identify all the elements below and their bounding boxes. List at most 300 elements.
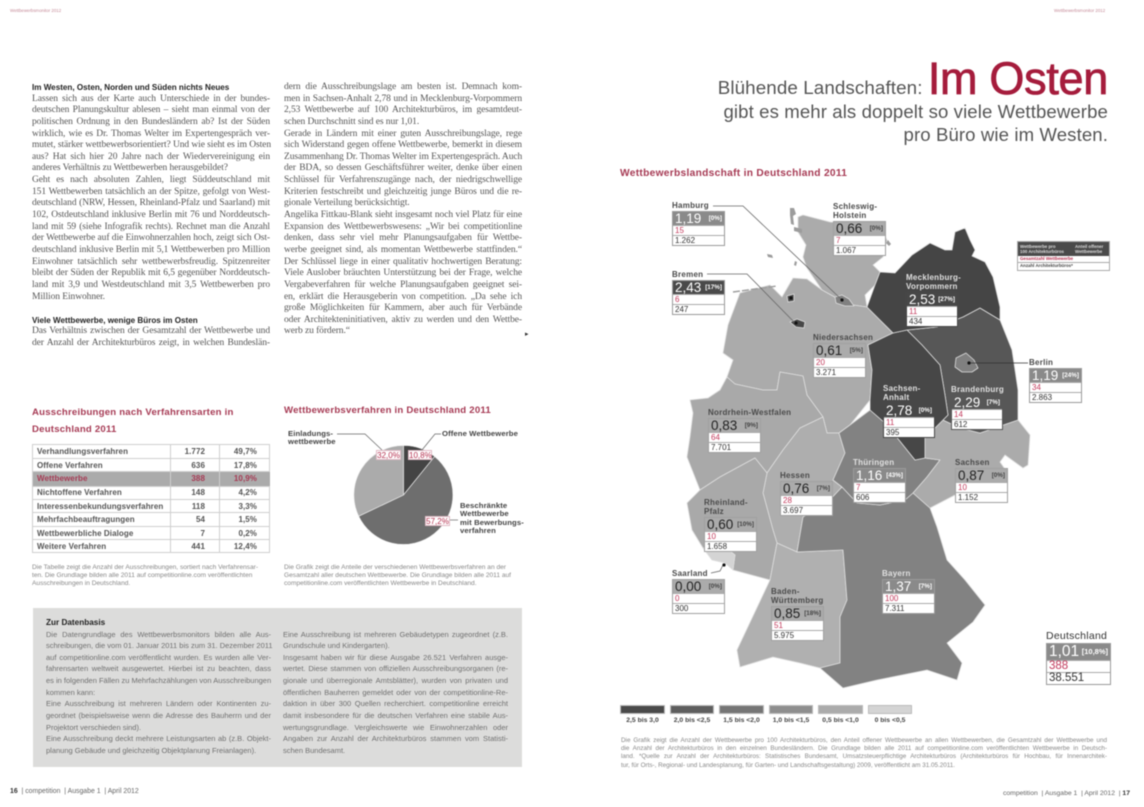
text: Berlin	[1029, 358, 1053, 367]
text column right: denken, dass sehr viel mehr Planungsaufgaben für Wettbe-	[284, 233, 522, 243]
state: Bremerhaven	[787, 294, 794, 302]
data: Bayern: [7%]	[919, 583, 932, 590]
row 8: Weitere Verfahren	[37, 542, 106, 551]
data: Rheinland-Pfalz	[704, 498, 756, 552]
data: Hamburg	[672, 201, 726, 246]
data: Sachsen-Anhalt: [0%]	[919, 407, 932, 414]
text column left: wirklich, wie es Dr. Thomas Welter im Expertengespräch ver-	[32, 129, 270, 139]
caption: table: Ausschreibungen in Deutschland.	[32, 580, 130, 587]
caption: pie chart: Die Grafik zeigt die Anteile der verschiedenen Wettbewerbsverfahren an der	[284, 564, 506, 571]
end-of-article arrow: ▸	[525, 331, 529, 338]
state: Berlin	[955, 353, 978, 372]
slice: Beschränkte Wettbewerbe	[359, 456, 453, 544]
data: Bayern: 1,37	[885, 579, 911, 594]
data: Baden-Württemberg: 5.975	[774, 631, 794, 640]
state: Rheinland-Pfalz	[687, 458, 777, 580]
text: Deutschland	[1046, 630, 1107, 642]
key row red	[1018, 256, 1109, 263]
row 5: 3,3%	[238, 502, 257, 510]
row 1: 1.772	[185, 447, 205, 456]
state: Sachsen	[913, 420, 1030, 508]
legend label: 1,0 bis <1,5	[773, 717, 809, 724]
data: Schleswig-Holstein: 1.067	[836, 246, 856, 255]
data: Nordrhein-Westfalen	[708, 408, 792, 452]
leader lines	[337, 434, 458, 520]
legend label: 2,0 bis <2,5	[674, 717, 710, 724]
swatch 0,5 bis 1,0	[818, 705, 863, 714]
pie label: Beschränkte Wettbewerbe: Wettbewerbe	[460, 509, 509, 518]
text: Hessen	[780, 471, 810, 480]
panel: Zur Datenbasis	[33, 608, 522, 767]
text column left	[32, 83, 272, 348]
text: Sachsen-	[883, 384, 921, 393]
data: Bremen: [17%]	[705, 284, 722, 291]
text: Bremen	[672, 270, 703, 279]
data: Rheinland-Pfalz: 1.658	[707, 542, 727, 551]
data: Baden-Württemberg	[770, 587, 824, 640]
key row: Anzahl Architekturbüros*	[1020, 263, 1073, 268]
text column left: der Anzahl der Architekturbüros zeigt, in welchen Bundeslän-	[32, 338, 270, 348]
text column right: Angelika Fittkau-Blank sieht insgesamt noch viel Platz für eine	[284, 210, 522, 220]
data: Saarland: [0%]	[709, 583, 722, 590]
text column left: land mit 59 (siehe Infografik rechts). Rechnet man die Anzahl	[32, 222, 270, 232]
state: Sachsen-Anhalt	[868, 330, 948, 460]
running header left: Wettbewerbsmonitor 2012	[10, 8, 61, 13]
swatch 1,0 bis 1,5	[769, 705, 813, 714]
text column right: en, erklärt die Herausgeberin von competition. „Da sehe ich	[284, 292, 522, 302]
data: Bayern	[882, 569, 935, 614]
table: Verfahrensarten	[32, 444, 270, 553]
data: Niedersachsen: [5%]	[850, 347, 863, 354]
row 3 highlighted	[33, 472, 270, 486]
row 6	[33, 513, 270, 526]
row 8: 441	[191, 542, 205, 551]
data: Sachsen: 10	[958, 483, 967, 492]
data: Mecklenburg-Vorpommern: 11	[909, 307, 917, 316]
text column right: 2,53 Wettbewerbe auf 100 Architekturbüros, im gesamtdeut-	[284, 105, 522, 115]
text column right: große Möglichkeiten für Kammern, aber auch für Verbände	[284, 303, 522, 313]
text: Saarland	[672, 569, 708, 578]
text column right: Vergabeverfahren für welche Planungsaufgaben geeignet sei-	[284, 280, 522, 290]
text column left: Million Einwohner.	[32, 292, 105, 302]
state: Niedersachsen	[723, 278, 893, 433]
data: Niedersachsen	[813, 333, 873, 378]
data: Mecklenburg-Vorpommern: [27%]	[938, 296, 955, 303]
state: Mecklenburg-Vorpommern	[867, 228, 1000, 333]
state: Nordrhein-Westfalen	[687, 372, 823, 490]
text column left: deutschland (NRW, Hessen, Rheinland-Pfalz und Saarland) mit	[32, 198, 270, 208]
caption: map: land. *Quelle zur Anzahl der Architekturbüros: Statistisches Bundesamt, Umsatzsteuerpflichtige Architekturbüros (Architekturbüros für Hochbau, für Innenarchitek-	[621, 753, 1107, 760]
text column left: anderes Verhältnis zu Wettbewerben herausgebildet?	[32, 163, 228, 173]
panel text left: Projektort verschieden sind).	[46, 723, 141, 732]
text column left: Geht es nach absoluten Zahlen, liegt Süddeutschland mit	[32, 175, 270, 185]
panel text left: auf competitionline.com veröffentlicht wurden. Es wurden alle Ver-	[46, 653, 271, 662]
data: Schleswig-Holstein: 7	[836, 236, 840, 245]
text column left: Im Westen, Osten, Norden und Süden nichts Neues	[32, 83, 229, 92]
row 8	[36, 542, 258, 551]
panel text right: schen Bundesamt.	[283, 746, 345, 755]
row 1: 49,7%	[234, 447, 257, 456]
text: Pfalz	[704, 507, 724, 516]
panel text right: damit insbesondere für die deutschen Verfahren eine stabile Aus-	[283, 711, 508, 720]
state: Hamburg	[835, 295, 854, 306]
legend label: 1,5 bis <2,0	[723, 717, 760, 724]
panel text right: Angaben zur Anzahl der Architekturbüros stammen vom Statisti-	[283, 734, 508, 743]
state: Schleswig-Holstein	[798, 215, 887, 307]
data: Brandenburg: 14	[954, 410, 963, 419]
text column left: Lassen sich aus der Karte auch Unterschiede in der bundes-	[32, 94, 270, 104]
text column right: Expansion des Wettbewerbswesens: „Wir bei competitionline	[284, 222, 522, 232]
state: Bayern	[797, 487, 985, 688]
text column right: men in Sachsen-Anhalt 2,78 und in Mecklenburg-Vorpommern	[284, 94, 522, 104]
text column right: schen Durchschnitt sind es nur 1,01.	[284, 117, 419, 127]
data: Thüringen	[852, 458, 906, 504]
data: Mecklenburg-Vorpommern	[906, 273, 961, 328]
data: Nordrhein-Westfalen: 7.701	[711, 443, 731, 452]
pie label: Beschränkte Wettbewerbe	[460, 501, 524, 535]
data: Brandenburg	[950, 385, 1004, 431]
heading: table: Deutschland 2011	[32, 424, 117, 435]
row 7: 7	[200, 528, 205, 538]
state: Thüringen	[833, 410, 940, 505]
data: Hamburg: [0%]	[709, 215, 722, 222]
swatch 2,0 bis 2,5	[670, 705, 714, 714]
state: Hessen	[763, 417, 845, 552]
text column right: werb zu fördern.“	[284, 326, 350, 336]
key row red: Gesamtzahl Wettbewerbe	[1020, 256, 1073, 261]
text: Rheinland-	[704, 498, 748, 507]
panel text left: kommen kann:	[46, 688, 95, 697]
text: Sachsen	[955, 458, 990, 467]
pie label: Beschränkte Wettbewerbe: verfahren	[460, 526, 496, 535]
data: Hamburg: 1,19	[675, 211, 701, 226]
data: Baden-Württemberg: [18%]	[804, 610, 821, 617]
text column right: Viele Auslober bräuchten Unterstützung bei der Frage, welche	[284, 268, 522, 278]
row 7: Wettbewerbliche Dialoge	[37, 528, 133, 538]
leader lines	[707, 206, 1028, 573]
data: Brandenburg: [7%]	[987, 399, 1000, 406]
data: Mecklenburg-Vorpommern: 2,53	[909, 292, 935, 307]
data: Deutschland: 1,01	[1049, 643, 1079, 660]
data: Saarland: 0	[675, 594, 679, 603]
text: Anhalt	[883, 393, 909, 402]
swatch 2,5 bis 3,0	[620, 705, 665, 714]
data: Berlin: 1,19	[1032, 368, 1058, 383]
data: Niedersachsen: 0,61	[816, 343, 842, 358]
headline	[718, 53, 1108, 146]
text column right: dern die Ausschreibungslage am besten ist. Demnach kom-	[284, 82, 522, 92]
data: Niedersachsen: 20	[816, 358, 825, 367]
data: Rheinland-Pfalz: [10%]	[737, 521, 754, 528]
data: Sachsen: [0%]	[992, 472, 1005, 479]
data: Saarland	[672, 569, 726, 614]
text: Nordrhein-Westfalen	[708, 408, 791, 417]
row 5: 118	[192, 502, 205, 510]
footer left: 16 | competition | Ausgabe 1 | April 2012	[10, 788, 139, 795]
text column right: Schlüssel für Verfahrenszugänge nach, der niedrigschwellige	[284, 175, 522, 185]
state: Bremen	[790, 319, 805, 328]
text column left: Das Verhältnis zwischen der Gesamtzahl der Wettbewerbe und	[32, 326, 270, 336]
legend label: 0 bis <0,5	[875, 717, 905, 724]
row 2: Offene Verfahren	[37, 460, 103, 470]
text column left: politischen Ordnung in den Bundesländern ab? Ist der Süden	[32, 117, 270, 127]
data: Hessen: 0,76	[783, 481, 809, 496]
panel text left: geordnet (beispielsweise wenn die Adresse des Bauherrn und der	[46, 711, 271, 720]
data: Saarland: 0,00	[675, 579, 701, 594]
data: Sachsen	[954, 458, 1008, 504]
map dots	[722, 296, 971, 567]
text column left: 151 Wettbewerben tatsächlich an der Spitze, gefolgt von West-	[32, 187, 270, 197]
data: Berlin: 34	[1032, 383, 1041, 392]
row 6: Mehrfachbeauftragungen	[37, 515, 135, 524]
data: Brandenburg: 612	[954, 420, 967, 429]
panel text right: daktion in über 300 Quellen recherchiert. competitionline erreicht	[283, 699, 508, 708]
text column right: der BDA, so dessen Geschäftsführer weiter, denke über einen	[284, 163, 522, 173]
data: Sachsen-Anhalt: 395	[886, 428, 899, 437]
legend: colour scale	[620, 704, 912, 724]
panel text left: schreibungen, die vom 01. Januar 2011 bis zum 31. Dezember 2011	[46, 641, 273, 650]
heading: map: Wettbewerbslandschaft in Deutschland 2011	[620, 168, 847, 179]
caption: map	[620, 736, 1108, 769]
row 8: 12,4%	[234, 542, 257, 551]
data: Hessen: 28	[783, 496, 792, 505]
data: Bremen: 6	[675, 295, 679, 304]
key header: Anteil offener	[1075, 244, 1103, 248]
data: Deutschland: [10,8%]	[1082, 647, 1108, 656]
heading: table: Ausschreibungen nach Verfahrensarten in	[32, 407, 234, 418]
data: Nordrhein-Westfalen: 64	[711, 433, 720, 442]
text column right: sich Widerstand gegen offene Wettbewerbe, bemerkt in diesem	[284, 140, 522, 150]
text column left: Viele Wettbewerbe, wenige Büros im Osten	[32, 316, 198, 325]
text column right: gionale Verteilung berücksichtigt.	[284, 198, 410, 208]
data: Berlin: 2.863	[1032, 393, 1052, 402]
text column right: Zusammenhang Dr. Thomas Welter im Expertengespräch. Auch	[284, 152, 522, 162]
text column left: deutschland inklusive Berlin mit 5,1 Wettbewerben pro Million	[32, 245, 270, 255]
panel text left: fahrensarten weltweit ausgewertet. Hierbei ist zu beachten, dass	[46, 664, 271, 673]
text: Thüringen	[853, 458, 894, 467]
pie percent: 10,8%: 10,8%	[409, 451, 432, 460]
text: Schleswig-	[833, 202, 877, 211]
row 3 highlighted: Wettbewerbe	[37, 474, 88, 483]
data: Baden-Württemberg: 0,85	[774, 606, 800, 621]
row 3 highlighted: 388	[191, 474, 205, 483]
data: Berlin: [24%]	[1062, 372, 1079, 379]
pie label: Einladungswettbewerbe	[287, 429, 336, 446]
text column right: Kriterien festschreibt und gleichzeitig junge Büros und die re-	[284, 187, 522, 197]
text: Baden-	[771, 587, 800, 596]
data: Rheinland-Pfalz: 10	[707, 532, 716, 541]
text: Brandenburg	[951, 385, 1004, 394]
East Frisian islands	[733, 286, 777, 292]
pie label: Einladungswettbewerbe: wettbewerbe	[288, 437, 336, 446]
heading: pie chart: Wettbewerbsverfahren in Deutschland 2011	[284, 405, 491, 416]
data: Thüringen: [43%]	[886, 472, 903, 479]
panel text left: es in folgenden Fällen zu Mehrfachzählungen von Ausschreibungen	[46, 676, 271, 685]
row 7	[33, 526, 270, 540]
caption: pie chart: competitionline.com veröffentlichten Wettbewerbe in Deutschland.	[284, 580, 477, 587]
data: Sachsen-Anhalt	[882, 384, 936, 439]
data: Bremen: 2,43	[675, 280, 701, 295]
data: Hessen: [7%]	[817, 485, 830, 492]
text: Württemberg	[771, 596, 824, 605]
data: Bayern: 7.311	[885, 604, 904, 613]
text: Niedersachsen	[813, 333, 873, 342]
data: Thüringen: 7	[856, 483, 860, 492]
data: Mecklenburg-Vorpommern: 434	[909, 317, 922, 326]
headline line 2: gibt es mehr als doppelt so viele Wettbewerbe	[723, 101, 1108, 122]
panel text left	[46, 630, 273, 755]
slice: Offene Wettbewerbe	[404, 446, 435, 495]
headline line 1: Blühende Landschaften: Im Osten	[718, 53, 1108, 104]
data: Deutschland: 38.551	[1049, 672, 1084, 684]
pie label: Beschränkte Wettbewerbe: Beschränkte	[460, 501, 507, 510]
row 4: 148	[191, 488, 205, 497]
footer right: competition | Ausgabe 1 | April 2012 | 17	[1003, 790, 1130, 797]
panel text left: Die Datengrundlage des Wettbewerbsmonitors bilden alle Aus-	[46, 630, 271, 638]
pie percent: 32,0%: 32,0%	[377, 451, 400, 460]
text: Holstein	[833, 211, 867, 220]
row 1	[33, 445, 270, 458]
caption: table: ten. Die Grundlage bilden alle 2011 auf competitionline.com veröffentlichten	[32, 572, 252, 579]
data: Hessen: 3.697	[783, 506, 803, 515]
pie percent: 57,2%: 57,2%	[426, 517, 449, 526]
text column left: land mit 3,9 und Westdeutschland mit 3,5 Wettbewerben pro	[32, 280, 270, 290]
panel heading: Zur Datenbasis	[46, 618, 105, 627]
key header: Wettbewerbe pro	[1020, 244, 1056, 248]
data: Sachsen: 1.152	[958, 493, 978, 502]
data: Nordrhein-Westfalen: [9%]	[745, 422, 758, 429]
data: Sachsen-Anhalt: 2,78	[886, 403, 912, 418]
data: Sachsen-Anhalt: 11	[886, 418, 894, 427]
panel text left: Eine Ausschreibung ist mehreren Ländern oder Kontinenten zu-	[46, 699, 271, 708]
row 2: 17,8%	[234, 460, 257, 470]
text column left: 102, Ostdeutschland inklusive Berlin mit 76 und Norddeutsch-	[32, 210, 270, 220]
data: Hamburg: 1.262	[675, 236, 695, 245]
data: Schleswig-Holstein: [0%]	[870, 225, 883, 232]
caption: map: die Anzahl der Architekturbüros in den einzelnen Bundesländern. Die Grundlage bilden alle 2011 auf competitionline.com veröffentlichten Wettbewerbe in Deutsch-	[621, 745, 1107, 752]
row 4: 4,2%	[238, 488, 257, 497]
caption: pie chart: Gesamtzahl aller deutschen Wettbewerbe. Die Grundlage bilden alle 2011 auf	[284, 572, 511, 579]
legend label: 0,5 bis <1,0	[822, 717, 859, 724]
panel text left: Eine Ausschreibung deckt mehrere Leistungsarten ab (z.B. Objekt-	[46, 734, 271, 743]
caption: table: Die Tabelle zeigt die Anzahl der Ausschreibungen, sortiert nach Verfahrensar-	[32, 564, 258, 571]
data: Schleswig-Holstein	[832, 202, 886, 256]
data: Rheinland-Pfalz: 0,60	[707, 517, 733, 532]
data: Bayern: 100	[885, 594, 898, 603]
state: Brandenburg	[907, 308, 1018, 433]
swatch 0 bis 0,5	[868, 705, 912, 714]
caption: map: Die Grafik zeigt die Anzahl der Wettbewerbe pro 100 Architekturbüros, den Anteil offener Wettbewerbe an allen Wettbewerben, die Gesamtzahl der Wettbewerbe und	[621, 737, 1107, 744]
text column right: Der Schlüssel liege in einer qualitativ hochwertigen Beratung:	[284, 257, 522, 267]
data: Bremen	[672, 270, 726, 316]
panel text right: gionale und überregionale Amtsblätter), wurden von privaten und	[283, 676, 508, 685]
swatch 1,5 bis 2,0	[719, 705, 764, 714]
data: Baden-Württemberg: 51	[774, 621, 783, 630]
text column left: aus? Hat sich hier 20 Jahre nach der Wiedervereinigung ein	[32, 152, 270, 162]
row 6: 1,5%	[238, 515, 257, 524]
heading: table	[32, 407, 234, 435]
text column left: deutschen Planungskultur ablesen – sieht man einmal von der	[32, 105, 270, 115]
row 3 highlighted: 10,9%	[234, 474, 257, 483]
text column right: Gerade in Ländern mit einer guten Ausschreibungslage, rege	[284, 129, 522, 139]
row 4	[33, 486, 270, 500]
row 2	[33, 458, 270, 472]
pie label: Offene Wettbewerbe: Offene Wettbewerbe	[442, 429, 518, 438]
state: Saarland	[703, 545, 735, 570]
data: Berlin	[1028, 358, 1082, 404]
row 5: Interessenbekundungsverfahren	[37, 502, 163, 510]
map key	[1017, 241, 1110, 271]
panel text right: wertungsgrundlage. Vergleichswerte wie Einwohnerzahlen oder	[283, 723, 508, 732]
caption: pie chart	[284, 564, 512, 587]
caption: table	[32, 564, 258, 587]
row 1: Verhandlungsverfahren	[37, 447, 128, 456]
row 2: 636	[191, 460, 205, 470]
row 6: 54	[196, 515, 205, 524]
caption: map: tur, für Orts-, Regional- und Landesplanung, für Garten- und Landschaftsgestaltung) 2009, veröffentlicht am 31.05.2011.	[621, 762, 955, 769]
key header	[1018, 242, 1109, 256]
legend label: 2,5 bis 3,0	[626, 717, 659, 724]
text: Bayern	[882, 569, 911, 578]
row 7: 0,2%	[238, 528, 257, 538]
data: Niedersachsen: 3.271	[816, 368, 836, 377]
row 5	[33, 500, 270, 513]
panel text right: öffentlichen Bauherren gemeldet oder von der competitionline-Re-	[283, 688, 508, 697]
data: Deutschland: 388	[1049, 660, 1068, 672]
islands	[767, 208, 891, 266]
data: Sachsen: 0,87	[958, 468, 984, 483]
text column right: werbe geeignet sind, als momentan Wettbewerbe stattfinden.“	[284, 245, 522, 255]
pie chart	[336, 432, 458, 545]
panel text right: Insgesamt haben wir für diese Ausgabe 26.521 Verfahren ausge-	[283, 653, 508, 662]
row 4: Nichtoffene Verfahren	[37, 488, 122, 497]
data: Schleswig-Holstein: 0,66	[836, 221, 862, 236]
key header: Wettbewerbe	[1075, 249, 1102, 254]
key header: 100 Architekturbüros	[1020, 249, 1064, 254]
text column left: mutet, stärker wettbewerbsorientiert? Und wie sieht es im Osten	[32, 140, 271, 150]
panel text right: Eine Ausschreibung ist mehreren Gebäudetypen zugeordnet (z.B.	[283, 630, 508, 638]
column rules	[170, 445, 171, 552]
text column left: Einwohner tatsächlich sehr wettbewerbsfreudig. Spitzenreiter	[32, 257, 270, 267]
text column left: der Wettbewerbe auf die Einwohnerzahlen hoch, zeigt sich Ost-	[32, 233, 270, 243]
text column left: bleibt der Süden der Republik mit 6,5 gegenüber Norddeutsch-	[32, 268, 270, 278]
pie label: Beschränkte Wettbewerbe: mit Bewerbungs-	[460, 518, 524, 527]
data: Saarland: 300	[675, 604, 688, 613]
panel text right: Grundschule und Kindergarten).	[283, 641, 390, 650]
running header right: Wettbewerbsmonitor 2012	[1054, 8, 1105, 13]
state: Baden-Württemberg	[737, 543, 847, 668]
text: Vorpommern	[906, 282, 958, 291]
panel text right: wertet. Diese stammen von offiziellen Ausschreibungsorganen (re-	[283, 664, 508, 673]
data: Thüringen: 606	[856, 493, 869, 502]
text column right	[284, 82, 522, 336]
text: Hamburg	[672, 201, 709, 210]
data: Hessen	[780, 471, 834, 516]
panel text right	[282, 630, 508, 755]
data: Deutschland	[1046, 630, 1112, 686]
pie label: Einladungswettbewerbe: Einladungs-	[288, 429, 333, 438]
slice: Einladungswettbewerbe	[354, 445, 404, 516]
text: Mecklenburg-	[906, 273, 961, 282]
data: Bremen: 247	[675, 305, 688, 314]
data: Nordrhein-Westfalen: 0,83	[711, 418, 737, 433]
headline line 3: pro Büro wie im Westen.	[904, 124, 1108, 145]
data: Hamburg: 15	[675, 226, 684, 235]
data: Brandenburg: 2,29	[954, 395, 980, 410]
panel text left: planung Gebäude und gleichzeitig Objektplanung Freianlagen).	[46, 746, 256, 755]
text column right: oder Architekteninitiativen, aktiv zu werden und den Wettbe-	[284, 315, 522, 325]
data: Thüringen: 1,16	[856, 468, 882, 483]
